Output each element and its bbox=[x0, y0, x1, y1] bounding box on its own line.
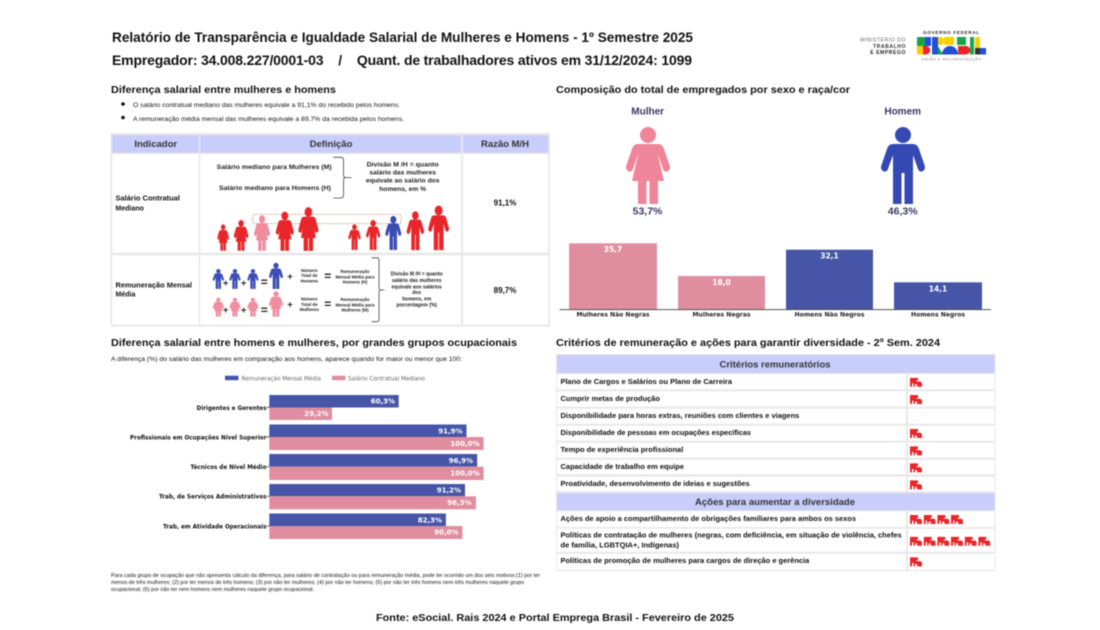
logo: ministério e governo federal: TRABALHO bbox=[873, 44, 906, 50]
table rows text: Proatividade, desenvolvimento de ideias e sugestões bbox=[560, 481, 750, 488]
logo: ministério e governo federal bbox=[860, 30, 986, 62]
table rows text: Capacidade de trabalho em equipe bbox=[560, 464, 684, 471]
bar chart: raça/cor: 35,7 bbox=[604, 245, 622, 254]
footnote: ocupacional; (6) por não ter nem homens nem mulheres naquele grupo ocupacional. bbox=[111, 587, 314, 593]
row labels: 91,1% bbox=[494, 198, 516, 208]
illustration: remuneração média equation: Total de bbox=[301, 273, 318, 278]
panel: grupos ocupacionais bbox=[111, 337, 540, 593]
logo: ministério e governo federal: UNIÃO E RECONSTRUÇÃO bbox=[922, 56, 981, 62]
definition: salário mediano: Salário mediano para Homens (H) bbox=[219, 185, 331, 192]
illustration: remuneração média equation: = bbox=[324, 297, 331, 311]
table: indicadores: Razão M/H bbox=[481, 139, 529, 150]
illustration: remuneração média equation: + bbox=[287, 272, 293, 282]
row labels: Salário Contratual bbox=[116, 196, 180, 203]
bar chart: raça/cor bbox=[560, 243, 991, 318]
table rows text bbox=[560, 379, 902, 565]
heading: diferença salarial: Diferença salarial entre mulheres e homens bbox=[111, 84, 336, 96]
bar chart: grupos ocupacionais: 96,9% bbox=[449, 457, 473, 465]
title: Empregador: 34.008.227/0001-03 / Quant. de trabalhadores ativos em 31/12/2024: 1099 bbox=[112, 52, 692, 68]
bar chart: raça/cor: 18,0 bbox=[712, 278, 731, 287]
definition: salário mediano: Divisão M /H = quanto bbox=[367, 162, 439, 169]
table rows text: Plano de Cargos e Salários ou Plano de Carreira bbox=[560, 379, 732, 386]
row labels bbox=[116, 196, 516, 298]
table rows text: Políticas de promoção de mulheres para cargos de direção e gerência bbox=[560, 558, 809, 565]
illustration: remuneração média equation: Mensal Média para bbox=[335, 302, 375, 308]
illustration: remuneração média equation: Mulheres bbox=[300, 307, 319, 312]
bar chart: grupos ocupacionais: 96,3% bbox=[447, 499, 472, 507]
icon: homem 46,3%: 46,3% bbox=[888, 206, 918, 218]
legend: Remuneração Mensal Média bbox=[242, 375, 321, 382]
definition: salário mediano bbox=[217, 157, 440, 198]
bar chart: grupos ocupacionais: Trab, de Serviços Administrativos bbox=[159, 494, 267, 501]
illustration: remuneração média equation: Mulheres (M) bbox=[341, 308, 369, 312]
bar chart: grupos ocupacionais: 60,3% bbox=[371, 398, 395, 406]
bar chart: grupos ocupacionais: Técnicos de Nível Médio bbox=[190, 464, 266, 471]
table rows text: de família, LGBTQIA+, Indígenas) bbox=[560, 542, 679, 549]
illustration: remuneração média equation bbox=[213, 258, 443, 322]
logo: ministério e governo federal: GOVERNO FEDERAL bbox=[923, 30, 980, 35]
definition: salário mediano: homens, em % bbox=[379, 186, 426, 193]
bar chart: raça/cor: Homens Negros bbox=[911, 312, 966, 318]
icons: marcadores vermelhos bbox=[910, 378, 990, 566]
logo: ministério e governo federal: E EMPREGO bbox=[870, 50, 906, 56]
illustration: remuneração média equation: Número bbox=[301, 296, 318, 302]
illustration: remuneração média equation: Divisão M /H = quanto bbox=[391, 272, 443, 278]
table: indicadores: Indicador bbox=[134, 139, 177, 150]
source line: Fonte: eSocial. Rais 2024 e Portal Emprega Brasil - Fevereiro de 2025 bbox=[376, 612, 734, 624]
table: critérios remuneratórios: Ações para aumentar a diversidade bbox=[695, 497, 855, 508]
logo: ministério e governo federal: MINISTÉRIO DO bbox=[860, 36, 906, 44]
table: indicadores: Definição bbox=[310, 139, 353, 150]
footnote: Para cada grupo de ocupação que não apresenta cálculo da diferença, para salário de contratação ou para remuneração média, pode ter ocorrido um dos seis motivos:(1) por ter bbox=[111, 573, 540, 579]
bullet list: A remuneração média mensal das mulheres equivale a 89,7% da recebida pelos homens. bbox=[133, 116, 404, 123]
illustration: remuneração média equation: Remuneração bbox=[340, 297, 370, 302]
table rows text: Disponibilidade para horas extras, reuniões com clientes e viagens bbox=[560, 413, 799, 420]
illustration: remuneração média equation: + bbox=[223, 278, 229, 289]
definition: salário mediano: Salário mediano para Mulheres (M) bbox=[217, 164, 332, 171]
bar chart: grupos ocupacionais: 91,2% bbox=[437, 487, 461, 495]
illustration: remuneração média equation: Mensal Média para bbox=[335, 274, 375, 279]
icon: mulher 53,7%: Mulher bbox=[631, 106, 664, 118]
table: critérios remuneratórios: Critérios remuneratórios bbox=[720, 359, 830, 370]
illustration: remuneração média equation: salário das mulheres bbox=[392, 278, 442, 284]
illustration: remuneração média equation: Homens bbox=[301, 278, 319, 284]
bar chart: raça/cor: 32,1 bbox=[820, 252, 839, 261]
table: critérios remuneratórios bbox=[556, 354, 996, 571]
bar chart: grupos ocupacionais: 82,3% bbox=[418, 516, 442, 524]
table rows text: Cumprir metas de produção bbox=[560, 396, 660, 403]
illustration: remuneração média equation: + bbox=[223, 305, 229, 316]
bar chart: raça/cor: 14,1 bbox=[929, 284, 947, 293]
panel: critérios e ações bbox=[556, 337, 996, 571]
bar chart: grupos ocupacionais: 29,2% bbox=[304, 410, 328, 418]
title: Relatório de Transparência e Igualdade Salarial de Mulheres e Homens - 1º Semestre 2025 bbox=[112, 29, 693, 45]
illustration: remuneração média equation: + bbox=[241, 278, 247, 289]
table rows text: Ações de apoio a compartilhamento de obrigações familiares para ambos os sexos bbox=[560, 516, 856, 523]
illustration: remuneração média equation: porcentagem (%) bbox=[396, 303, 437, 309]
bullet list: O salário contratual mediano das mulheres equivale a 91,1% do recebido pelos homens. bbox=[133, 102, 400, 109]
definition: salário mediano: equivale ao salário dos bbox=[366, 178, 440, 184]
bar chart: grupos ocupacionais: Dirigentes e Gerentes bbox=[196, 405, 267, 412]
bar chart: raça/cor: Mulheres Não Negras bbox=[576, 312, 650, 318]
bar chart: raça/cor: Homens Não Negros bbox=[794, 312, 865, 318]
bar chart: grupos ocupacionais: 90,0% bbox=[434, 529, 458, 537]
row labels: Mediano bbox=[116, 205, 144, 212]
table rows text: Políticas de contratação de mulheres (negras, com deficiência, em situação de violência, chefes bbox=[560, 532, 902, 539]
illustration: remuneração média equation: = bbox=[261, 303, 268, 317]
footnote bbox=[111, 573, 540, 593]
illustration: remuneração média equation: Total de bbox=[301, 302, 318, 307]
heading: composição: Composição do total de empregados por sexo e raça/cor bbox=[556, 84, 850, 96]
subtitle: A diferença (%) do salário das mulheres em comparação aos homens, aparece quando for maior ou menor que 100: bbox=[111, 356, 462, 363]
table rows text: Tempo de experiência profissional bbox=[560, 447, 683, 454]
bar chart: raça/cor: Mulheres Negras bbox=[692, 312, 751, 318]
icon: mulher 53,7% bbox=[626, 106, 670, 218]
illustration: remuneração média equation: dos bbox=[412, 290, 421, 296]
panel: composição do total bbox=[556, 84, 991, 318]
row labels: 89,7% bbox=[494, 286, 516, 295]
legend bbox=[225, 375, 425, 382]
bar chart: grupos ocupacionais bbox=[130, 395, 484, 539]
bar chart: grupos ocupacionais: Profissionais em Ocupações Nível Superior bbox=[130, 434, 267, 441]
illustration: remuneração média equation: homens, em bbox=[402, 296, 432, 302]
heading: critérios: Critérios de remuneração e ações para garantir diversidade - 2º Sem. 2024 bbox=[556, 337, 940, 349]
icon: homem 46,3%: Homem bbox=[884, 106, 921, 118]
bar chart: grupos ocupacionais: Trab, em Atividade Operacionais bbox=[163, 523, 267, 530]
bullet list bbox=[121, 102, 404, 123]
panel: diferença salarial bbox=[110, 84, 550, 326]
bar chart: grupos ocupacionais: 91,9% bbox=[438, 427, 462, 435]
definition: salário mediano: salário das mulheres bbox=[369, 170, 436, 176]
illustration: remuneração média equation: Homens (H) bbox=[343, 280, 368, 284]
footnote: menos de três mulheres; (2) por ter menos de três homens; (3) por não ter mulheres; (4) por não ter homens; (5) por não ter três homens nem três mulheres naquele grupo bbox=[111, 580, 524, 586]
illustration: remuneração média equation: + bbox=[241, 305, 247, 316]
illustration: remuneração média equation: = bbox=[324, 269, 331, 283]
illustration: remuneração média equation: + bbox=[287, 300, 293, 310]
illustration: salário mediano people bbox=[218, 206, 449, 250]
table: indicadores bbox=[110, 133, 550, 326]
row labels: Remuneração Mensal bbox=[116, 283, 192, 290]
title bbox=[112, 29, 693, 68]
row labels: Média bbox=[116, 291, 135, 298]
illustration: remuneração média equation: Número bbox=[301, 268, 318, 273]
illustration: remuneração média equation: Remuneração bbox=[340, 269, 370, 274]
legend: Salário Contratual Mediano bbox=[348, 375, 425, 382]
icon: homem 46,3% bbox=[881, 106, 925, 218]
bar chart: grupos ocupacionais: 100,0% bbox=[450, 440, 480, 448]
illustration: remuneração média equation: = bbox=[261, 275, 268, 289]
icon: mulher 53,7%: 53,7% bbox=[633, 206, 663, 218]
table rows text: Disponibilidade de pessoas em ocupações específicas bbox=[560, 430, 751, 437]
illustration: remuneração média equation: equivale aos salários bbox=[392, 285, 442, 291]
heading: grupos ocupacionais: Diferença salarial entre homens e mulheres, por grandes grupos ocupacionais bbox=[111, 337, 517, 349]
bar chart: grupos ocupacionais: 100,0% bbox=[450, 470, 480, 478]
